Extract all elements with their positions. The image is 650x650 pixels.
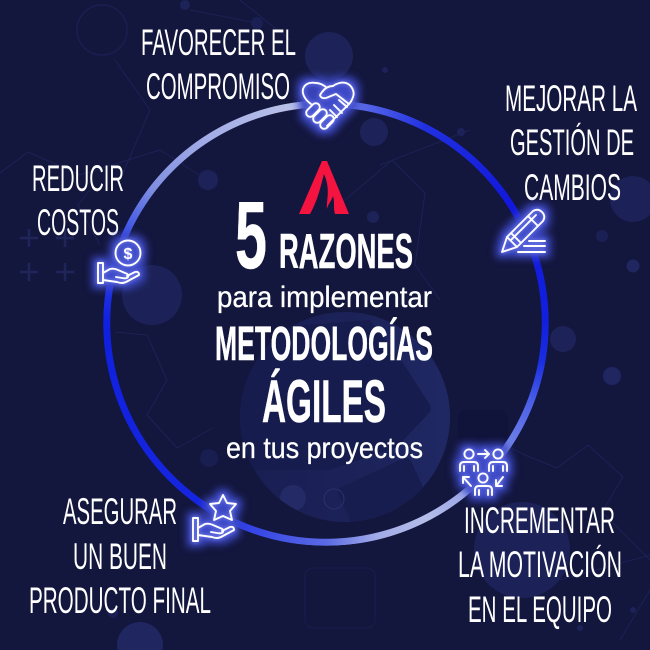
number 5: 5	[235, 182, 267, 289]
label: incrementar la motivación en el equipo	[458, 499, 622, 630]
label: reducir costos: REDUCIR	[32, 157, 124, 199]
label: favorecer el compromiso: FAVORECER EL	[141, 21, 296, 63]
icon: handshake heart	[303, 83, 354, 130]
label: asegurar un buen producto final: UN BUEN	[73, 535, 167, 577]
word METODOLOGÍAS: METODOLOGÍAS	[215, 317, 433, 371]
word ÁGILES: ÁGILES	[262, 368, 386, 435]
logo: red flame A	[299, 161, 349, 214]
label: favorecer el compromiso: COMPROMISO	[146, 65, 290, 107]
icon: team with arrows	[460, 449, 507, 495]
icon: hand holding coin	[98, 240, 140, 283]
icon: pencil and lines	[502, 210, 545, 252]
circular gradient ring	[103, 100, 549, 546]
headline	[215, 182, 433, 465]
label: asegurar un buen producto final: PRODUCTO FINAL	[29, 579, 211, 621]
icon: hand holding coin: $	[124, 246, 133, 263]
label: asegurar un buen producto final: ASEGURAR	[63, 490, 177, 532]
label: favorecer el compromiso	[141, 21, 296, 107]
icon: hand holding star	[193, 495, 236, 541]
label: asegurar un buen producto final	[29, 490, 211, 621]
label: mejorar la gestión de cambios	[505, 77, 637, 208]
label: reducir costos	[32, 157, 124, 243]
line: en tus proyectos: en tus proyectos	[226, 432, 423, 465]
line: para implementar: para implementar	[217, 281, 432, 314]
word RAZONES: RAZONES	[279, 225, 413, 279]
label: reducir costos: COSTOS	[37, 201, 119, 243]
